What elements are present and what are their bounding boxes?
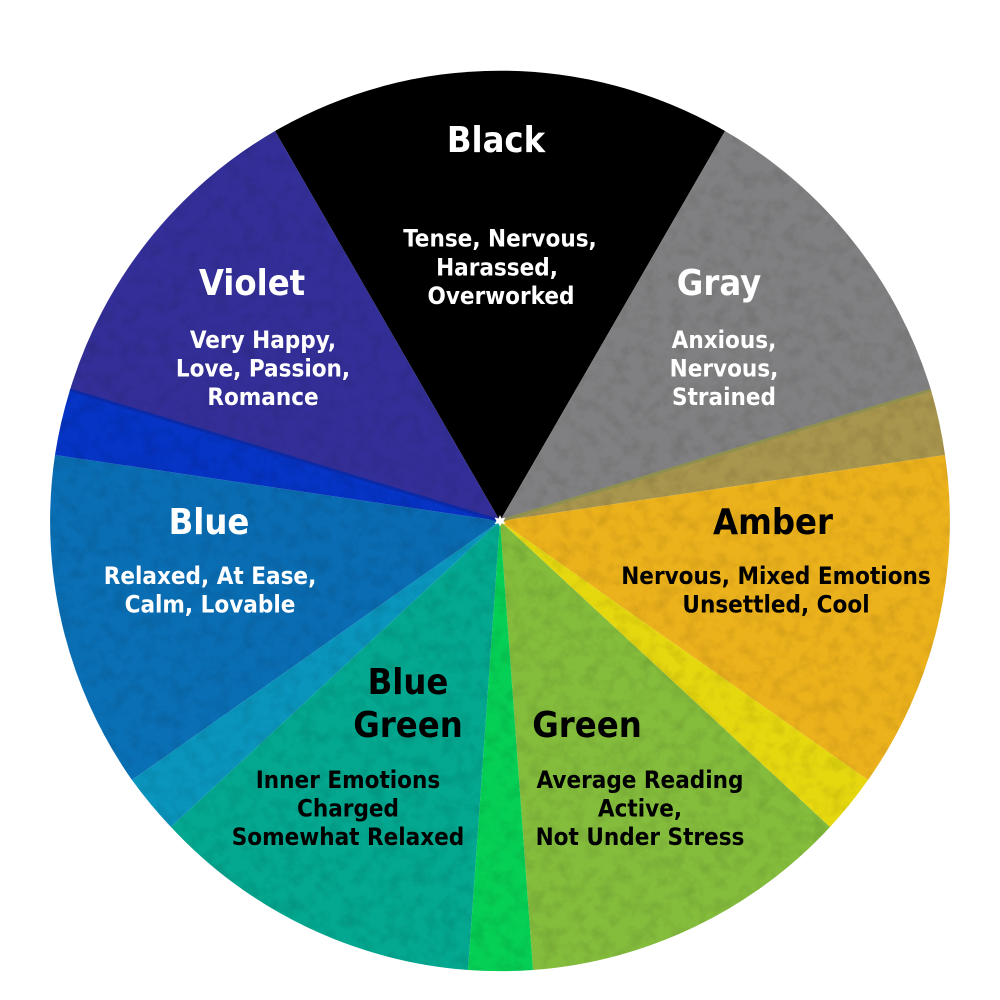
wedge: violet	[70, 131, 500, 521]
label: green: Active,	[598, 794, 682, 822]
label: gray: Nervous,	[670, 354, 778, 382]
label: violet: Romance	[207, 383, 319, 411]
label: black: Overworked	[428, 282, 574, 310]
label: blue green: Inner Emotions	[256, 766, 440, 794]
label: green: Not Under Stress	[536, 823, 744, 851]
label: gray: Gray	[677, 263, 761, 304]
wedge: teal blue	[132, 521, 500, 827]
label: black	[403, 120, 597, 310]
label: blue: Relaxed, At Ease,	[104, 562, 316, 590]
wedge: gray	[500, 131, 931, 521]
label: amber: Nervous, Mixed Emotions	[621, 562, 931, 590]
label: gray	[670, 263, 778, 411]
label: green	[532, 705, 744, 851]
label: green: Green	[532, 705, 642, 746]
wedge: amber	[500, 455, 950, 780]
label: blue green: Somewhat Relaxed	[232, 823, 464, 851]
label: amber	[621, 502, 931, 618]
label: green: Average Reading	[537, 766, 743, 794]
label: violet	[176, 263, 350, 411]
wedge: gray-amber transition	[500, 390, 945, 521]
label: blue green: Charged	[297, 794, 399, 822]
label: blue	[104, 502, 316, 618]
wedge: yellow	[500, 521, 868, 827]
label: violet: Love, Passion,	[176, 354, 350, 382]
label: blue: Blue	[169, 502, 249, 543]
label: gray: Anxious,	[672, 326, 776, 354]
wedge: green	[500, 521, 830, 970]
wedge: blue	[50, 455, 500, 780]
label: amber: Unsettled, Cool	[682, 590, 870, 618]
label: blue green: Blue	[368, 662, 448, 703]
label: blue: Calm, Lovable	[125, 590, 295, 618]
label: blue green: Green	[353, 705, 463, 746]
wedge: blue green	[171, 521, 500, 970]
label: black: Black	[447, 120, 547, 161]
label: gray: Strained	[672, 383, 776, 411]
label: amber: Amber	[713, 502, 833, 543]
label: violet: Very Happy,	[190, 326, 336, 354]
label: blue green	[232, 662, 464, 851]
wedge: deep blue	[55, 390, 500, 521]
label: black: Tense, Nervous,	[403, 224, 597, 252]
label: violet: Violet	[199, 263, 305, 304]
label: black: Harassed,	[436, 254, 558, 282]
wedge: bright green	[468, 521, 533, 971]
center star	[494, 515, 506, 526]
wedge: black	[275, 71, 725, 521]
